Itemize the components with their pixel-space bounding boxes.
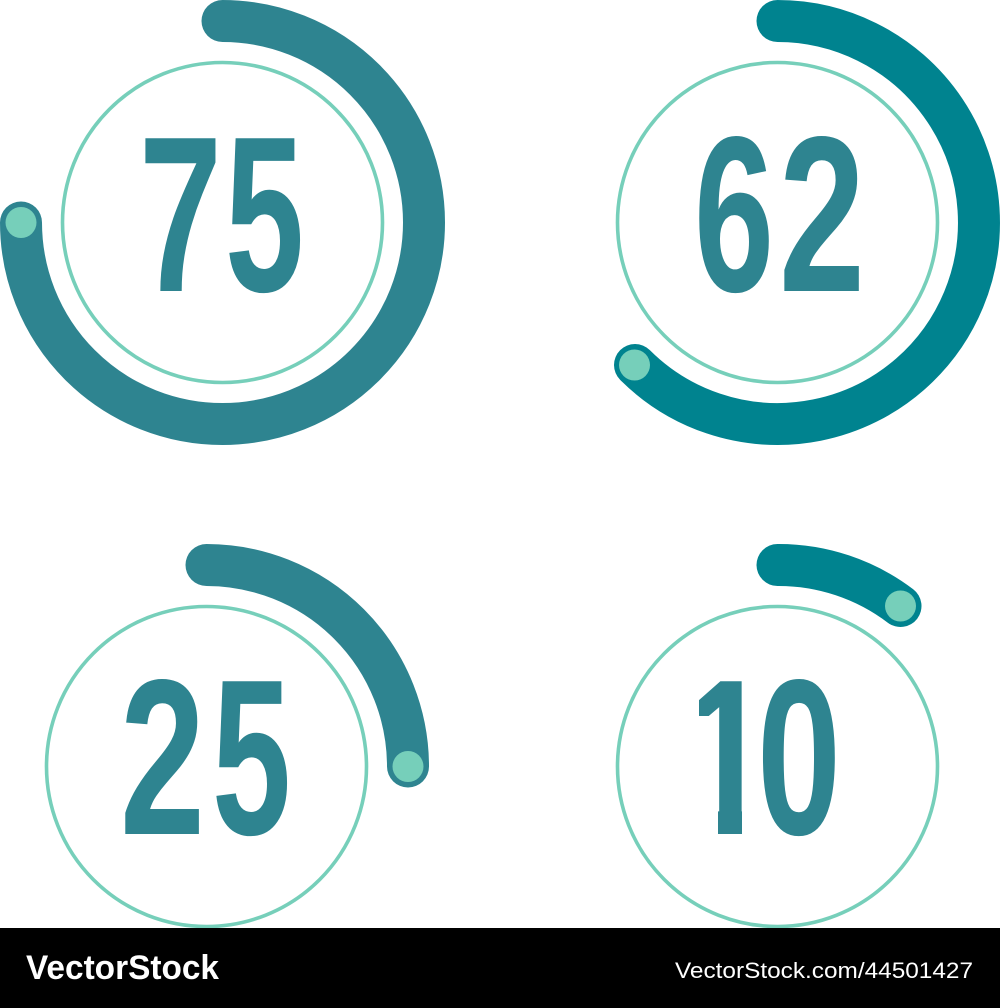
knob 75: [6, 207, 36, 238]
inner ring 75: [62, 62, 382, 382]
footer bar: [0, 928, 1000, 1008]
knob 10: [885, 590, 916, 622]
progress arc 75: [21, 21, 424, 424]
knob 62: [619, 350, 650, 380]
number 25: 2: [120, 634, 205, 882]
number 75: 7: [139, 91, 222, 339]
number 25: 5: [212, 634, 291, 882]
number 62: 2: [779, 91, 865, 339]
number 62: 6: [694, 91, 774, 339]
number 10: 1: [681, 634, 772, 882]
number 10: 0: [757, 634, 841, 882]
knob 25: [392, 751, 424, 782]
number 10: [699, 679, 835, 836]
gauge: 62 percent: [618, 21, 979, 424]
inner ring 62: [618, 62, 938, 382]
footer image id: VectorStock.com/44501427: [675, 958, 973, 983]
progress arc 10: [778, 565, 900, 606]
footer logo text: VectorStock: [26, 949, 219, 987]
gauge: 25 percent: [46, 565, 424, 926]
gauge: 10 percent: [618, 565, 938, 926]
progress arc 25: [206, 565, 408, 766]
gauge: 75 percent: [6, 21, 424, 424]
number 75: 5: [225, 91, 304, 339]
inner ring 10: [618, 606, 938, 926]
inner ring 25: [46, 606, 366, 926]
progress arc 62: [635, 21, 979, 424]
